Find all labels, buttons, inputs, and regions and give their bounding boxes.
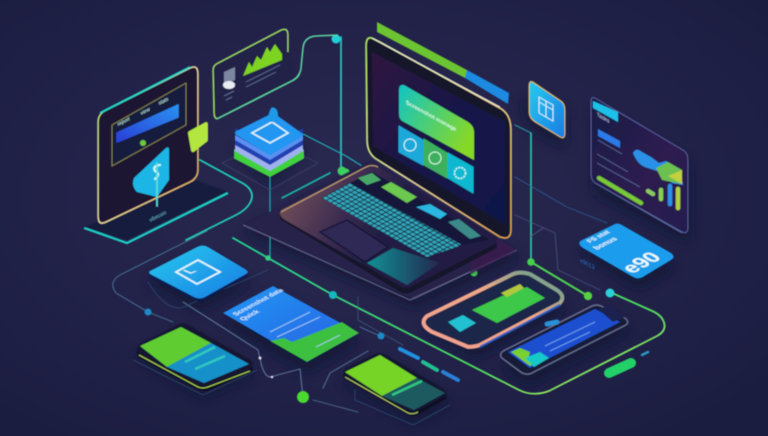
phone rim bbox=[139, 355, 250, 388]
center phone lower area bbox=[382, 378, 445, 410]
tablet yellow tab bbox=[501, 284, 524, 297]
pill dashes bbox=[400, 322, 648, 380]
palm rest teal bbox=[367, 248, 440, 285]
phone lines bbox=[545, 322, 595, 351]
main green card bbox=[399, 85, 474, 160]
green section bbox=[270, 322, 359, 362]
stat big number: e90 bbox=[616, 249, 667, 277]
stat caption: e9013 bbox=[580, 258, 595, 272]
card text: Screenshot manage bbox=[406, 100, 457, 134]
function keys green 2 bbox=[381, 182, 417, 203]
stack icon bbox=[252, 122, 288, 143]
green progress bar bbox=[599, 178, 641, 203]
tile 2 bbox=[424, 139, 447, 178]
panel: layered database stack bbox=[222, 107, 318, 190]
laptop lid bbox=[366, 38, 511, 238]
shield icon bbox=[133, 147, 169, 197]
platform bbox=[243, 160, 517, 300]
tablet green card bbox=[472, 287, 545, 323]
inner chart frame bbox=[112, 83, 186, 166]
panel: laptop bbox=[243, 22, 517, 300]
hinge strip bbox=[350, 172, 490, 245]
panel: blue icon card bbox=[149, 246, 248, 302]
keyboard bbox=[322, 183, 462, 257]
tablet lower rim bbox=[480, 305, 560, 347]
document heading: Screenshot data bbox=[232, 288, 286, 317]
panel: payment kiosk bbox=[84, 67, 228, 243]
document subheading: Quick bbox=[239, 309, 262, 322]
phone cyan shape bbox=[525, 352, 549, 367]
tile 1 bbox=[399, 126, 423, 165]
panel: blue stat card bbox=[579, 224, 674, 278]
function blue bbox=[416, 204, 447, 219]
green tile bbox=[190, 124, 206, 150]
green top banner bbox=[377, 22, 467, 78]
connector nodes bbox=[144, 34, 614, 403]
body lines bbox=[597, 140, 640, 187]
blue progress bar bbox=[117, 105, 178, 142]
panel: blue square widget bbox=[529, 82, 565, 138]
panel: tablet bbox=[423, 272, 562, 347]
connector lines bbox=[113, 37, 665, 425]
footer line bbox=[595, 183, 682, 233]
tile 1 icon bbox=[404, 139, 416, 151]
kiosk label 3: stats bbox=[158, 96, 169, 107]
soft shadows bbox=[137, 100, 690, 422]
frame connector bbox=[217, 35, 338, 119]
area chart bbox=[633, 150, 683, 185]
top bezel bbox=[372, 38, 500, 107]
phone dark tab bbox=[598, 305, 625, 322]
dollar stem icon bbox=[154, 163, 160, 206]
heading text: Tasks bbox=[597, 112, 609, 125]
stack top bbox=[237, 115, 301, 153]
icon card letter: L bbox=[180, 267, 200, 275]
kiosk base bbox=[84, 178, 228, 240]
laptop screen bbox=[372, 52, 505, 224]
icon card glyph bbox=[176, 260, 220, 284]
panel: blue and green document bbox=[223, 286, 359, 362]
phone blue area bbox=[167, 343, 249, 383]
kiosk screen bbox=[98, 67, 198, 223]
panel: chart card bbox=[213, 29, 338, 119]
chart lines bbox=[246, 65, 280, 87]
function keys teal bbox=[448, 219, 481, 239]
trackpad bbox=[320, 220, 388, 262]
mountain chart bbox=[243, 44, 282, 76]
mini bars bbox=[648, 186, 678, 208]
tile 3 icon bbox=[454, 168, 466, 178]
widget icon bbox=[539, 97, 553, 121]
tablet cyan block bbox=[448, 315, 476, 332]
deck rim bbox=[281, 166, 378, 212]
panel: left phone bbox=[137, 324, 252, 391]
panel: dark blue phone bbox=[500, 305, 628, 374]
phone rows bbox=[185, 347, 225, 369]
stat small text: FS stat bbox=[586, 230, 613, 244]
panel: analytics dashboard bbox=[591, 98, 688, 233]
blue top banner bbox=[465, 70, 509, 104]
kiosk label 2: view bbox=[140, 106, 151, 117]
chart card glyph bbox=[223, 67, 235, 100]
stack lock pin bbox=[268, 107, 278, 122]
base text: vibecoin bbox=[149, 210, 167, 224]
center phone row bbox=[392, 381, 422, 395]
cyan header bbox=[593, 101, 618, 122]
function keys green bbox=[358, 173, 381, 185]
tile 2 icon bbox=[429, 152, 441, 164]
panel: center phone bbox=[344, 353, 446, 416]
kiosk labels: report bbox=[117, 116, 131, 128]
phone green shape bbox=[511, 348, 538, 366]
laptop body side bbox=[280, 213, 497, 294]
blue label bar bbox=[598, 129, 620, 148]
status dot bbox=[140, 140, 146, 146]
stat small text 2: bonus bbox=[591, 235, 620, 251]
tile 3 bbox=[448, 153, 473, 193]
center phone rim bbox=[345, 377, 418, 414]
document lines bbox=[270, 312, 340, 347]
laptop deck bbox=[280, 166, 497, 288]
